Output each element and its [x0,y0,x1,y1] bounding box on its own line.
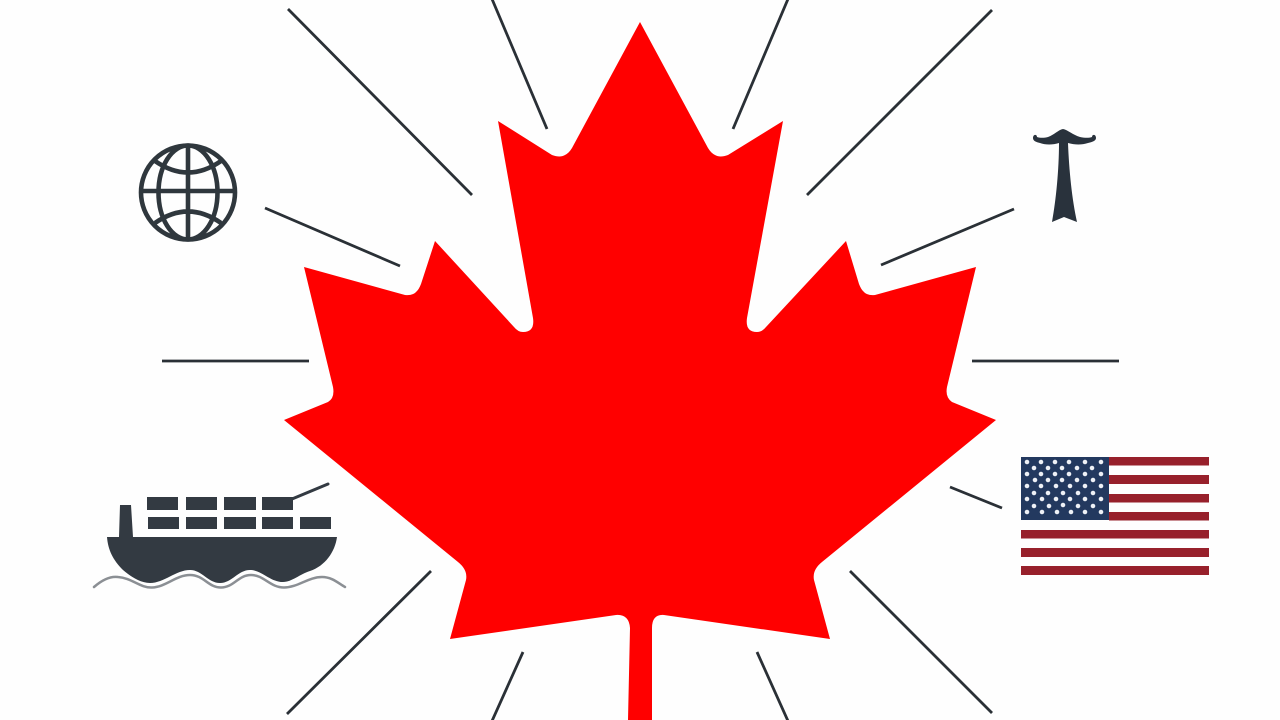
icon: cargo ship [94,484,345,588]
ship containers [147,497,331,529]
maple leaf [284,22,996,720]
ship waves [94,575,345,588]
radiating lines [162,0,1119,720]
flag stripes [1021,457,1209,575]
icon: globe [141,145,235,240]
flag stars [1027,462,1101,512]
icon: CN tower style monument [1033,129,1096,222]
ship hull [107,505,337,583]
icon: United States flag [1021,457,1209,575]
ship crane [292,484,328,499]
flag canton [1021,457,1109,520]
